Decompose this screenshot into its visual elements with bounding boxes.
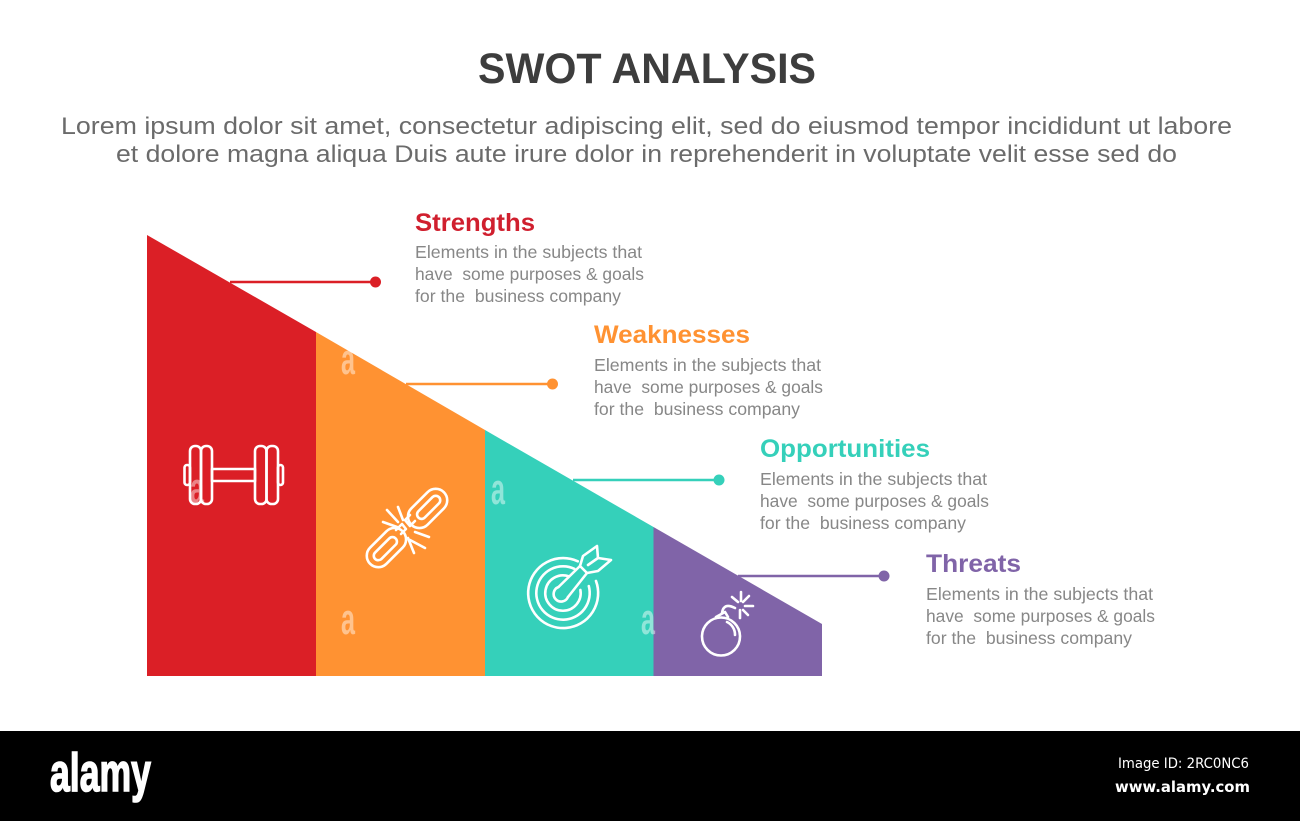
icon: bomb	[702, 592, 753, 656]
watermark marks: a	[641, 595, 655, 644]
image id: Image ID: 2RC0NC6	[1118, 756, 1249, 772]
footer url: www.alamy.com	[1115, 778, 1250, 796]
label: threats: have some purposes & goals	[926, 606, 1155, 626]
label: opportunities: Elements in the subjects that	[760, 469, 987, 489]
label: opportunities: for the business company	[760, 513, 966, 533]
descending triangle chart	[147, 235, 822, 676]
label: strengths: Strengths	[415, 209, 535, 237]
icon: broken chain	[362, 484, 452, 572]
segment: strengths	[147, 235, 316, 676]
label: strengths: for the business company	[415, 286, 621, 306]
label: threats: Elements in the subjects that	[926, 584, 1153, 604]
label: strengths: have some purposes & goals	[415, 264, 644, 284]
label: opportunities	[760, 435, 989, 533]
label: weaknesses	[594, 321, 823, 419]
connector: opportunities	[573, 474, 724, 486]
watermark marks: a	[190, 464, 204, 513]
watermark marks	[190, 335, 655, 644]
icon: target with arrow	[528, 546, 611, 628]
connector: weaknesses	[406, 378, 558, 390]
label: weaknesses: have some purposes & goals	[594, 377, 823, 397]
subtitle text block	[61, 113, 1232, 168]
footer bar	[0, 731, 1300, 821]
watermark marks: a	[341, 595, 355, 644]
label: opportunities: Opportunities	[760, 435, 930, 463]
label: weaknesses: Weaknesses	[594, 321, 750, 349]
label: threats	[926, 550, 1155, 648]
subtitle text block: et dolore magna aliqua Duis aute irure dolor in reprehenderit in voluptate velit esse sed do	[116, 141, 1177, 168]
label: strengths	[415, 209, 644, 306]
title: SWOT ANALYSIS	[478, 45, 816, 93]
label: weaknesses: Elements in the subjects that	[594, 355, 821, 375]
label: weaknesses: for the business company	[594, 399, 800, 419]
connector: strengths	[230, 276, 381, 288]
footer logo: alamy	[50, 743, 151, 803]
label: strengths: Elements in the subjects that	[415, 242, 642, 262]
label: threats: Threats	[926, 550, 1021, 578]
watermark marks: a	[341, 335, 355, 384]
label: threats: for the business company	[926, 628, 1132, 648]
segment: threats	[654, 527, 822, 676]
icon: dumbbell	[184, 446, 283, 504]
label: opportunities: have some purposes & goals	[760, 491, 989, 511]
subtitle text block: Lorem ipsum dolor sit amet, consectetur adipiscing elit, sed do eiusmod tempor incididunt ut labore	[61, 113, 1232, 140]
watermark marks: a	[491, 465, 505, 514]
segment: opportunities	[485, 430, 654, 676]
segment: weaknesses	[316, 332, 485, 676]
connector: threats	[738, 570, 890, 582]
